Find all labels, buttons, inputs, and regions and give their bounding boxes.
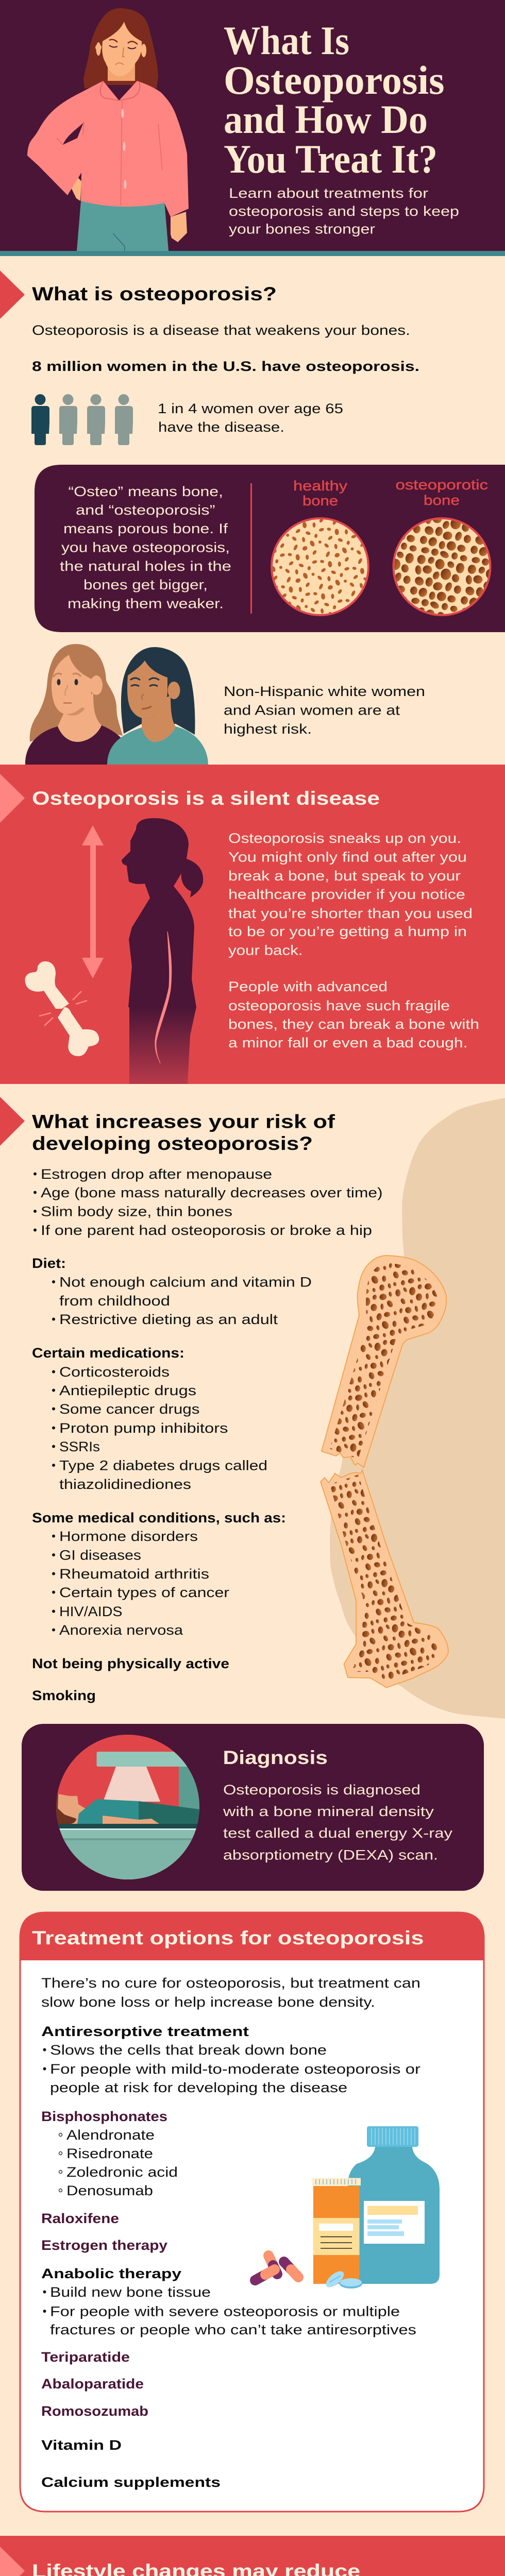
subsection: anabolic therapy: Build new bone tissue <box>50 2284 211 2300</box>
intro text: There’s no cure for osteoporosis, but treatment can <box>41 1975 420 1991</box>
list: certain medications <box>32 1345 267 1492</box>
list: general risk factors: Estrogen drop after menopause <box>41 1166 272 1182</box>
list: certain medications: Certain medications: <box>32 1345 184 1361</box>
icon: fracture sparks <box>39 991 87 1026</box>
list: certain medications: thiazolidinediones <box>59 1477 191 1492</box>
definition text: Osteoporosis is a disease that weakens your bones. <box>32 323 410 338</box>
definition text: “Osteo” means bone, <box>68 484 223 499</box>
list: certain medications: Corticosteroids <box>59 1364 170 1380</box>
background blob <box>330 1098 505 1719</box>
list: diet: Not enough calcium and vitamin D <box>59 1275 312 1290</box>
title: You Treat It? <box>224 137 437 181</box>
drug: abaloparatide: Abaloparatide <box>41 2376 144 2392</box>
panel: what is osteoporosis <box>0 270 505 765</box>
definition text: you have osteoporosis, <box>61 540 230 555</box>
list: certain medications: Type 2 diabetes drugs called <box>59 1458 267 1473</box>
list: medical conditions: Hormone disorders <box>59 1529 198 1544</box>
risk text: highest risk groups <box>224 684 425 737</box>
body text: diagnosis: absorptiometry (DEXA) scan. <box>223 1848 438 1863</box>
icon: broken bone <box>25 961 99 1056</box>
icon: section chevron <box>0 270 25 319</box>
title: and How Do <box>224 97 428 142</box>
body text: diagnosis: with a bone mineral density <box>223 1804 434 1819</box>
panel: lifestyle changes <box>0 2536 505 2576</box>
definition text: the natural holes in the <box>60 558 231 574</box>
subtitle: osteoporosis and steps to keep <box>229 204 459 219</box>
illustration: woman holding her back <box>27 8 189 251</box>
body text: silent disease: healthcare provider if you notice <box>228 887 465 902</box>
label: healthy bone <box>293 478 348 509</box>
body text: silent disease: your back. <box>228 943 303 958</box>
subtitle: your bones stronger <box>229 222 375 237</box>
panel: diagnosis <box>22 1724 484 1891</box>
risk text: highest risk groups: highest risk. <box>224 721 312 737</box>
subsection: antiresorptive treatment: For people with mild-to-moderate osteoporosis or <box>50 2061 420 2077</box>
icon: section chevron <box>0 2547 25 2576</box>
list: certain medications: Some cancer drugs <box>59 1401 200 1417</box>
list: general risk factors: Slim body size, thin bones <box>41 1204 232 1219</box>
panel: risk factors <box>0 1097 505 1719</box>
list: certain medications: Proton pump inhibitors <box>59 1420 228 1436</box>
drug list: bisphosphonates <box>41 2109 178 2198</box>
heading: Treatment options for osteoporosis <box>32 1927 424 1948</box>
list: general risk factors: Age (bone mass naturally decreases over time) <box>41 1185 382 1200</box>
body text: silent disease: that you’re shorter than you used <box>228 906 473 921</box>
body text: silent disease: to be or you’re getting a hump in <box>228 924 467 939</box>
statistic: 1 in 4: have the disease. <box>158 419 284 435</box>
list: general risk factors: If one parent had osteoporosis or broke a hip <box>41 1223 372 1238</box>
heading: Osteoporosis is a silent disease <box>32 788 380 809</box>
heading: What increases your risk of <box>32 1111 335 1132</box>
subsection: antiresorptive treatment: people at risk for developing the disease <box>50 2080 347 2095</box>
title: What Is <box>224 18 349 63</box>
list: medical conditions: HIV/AIDS <box>59 1604 123 1619</box>
definition text: and “osteoporosis” <box>76 502 215 518</box>
label: osteoporotic bone: osteoporotic <box>396 477 488 493</box>
list: diet: from childhood <box>59 1293 170 1309</box>
definition text: making them weaker. <box>68 596 224 611</box>
body text: diagnosis: test called a dual energy X-ray <box>223 1825 453 1841</box>
illustration: two women <box>25 644 208 765</box>
body text: silent disease: bones, they can break a bone with <box>228 1016 479 1032</box>
intro text <box>41 1975 420 2010</box>
illustration: DEXA scan <box>56 1735 199 1879</box>
intro text: slow bone loss or help increase bone density. <box>41 1994 375 2010</box>
heading: developing osteoporosis? <box>32 1133 313 1154</box>
drug list: bisphosphonates: Alendronate <box>66 2127 155 2143</box>
list: certain medications: SSRIs <box>59 1439 100 1454</box>
supplement: calcium: Calcium supplements <box>41 2475 221 2490</box>
supplement: vitamin D: Vitamin D <box>41 2437 122 2453</box>
body text: silent disease <box>228 831 479 1050</box>
subsection: antiresorptive treatment: Slows the cells that break down bone <box>50 2042 327 2058</box>
risk text: highest risk groups: and Asian women are at <box>224 703 400 718</box>
statistic: 1 in 4: 1 in 4 women over age 65 <box>158 401 343 416</box>
panel: osteo definition and bone comparison <box>35 465 505 632</box>
label: osteoporotic bone: bone <box>424 493 460 508</box>
list: diet: Restrictive dieting as an adult <box>59 1312 278 1327</box>
label: osteoporotic bone <box>396 477 488 508</box>
definition text <box>60 484 231 611</box>
label: healthy bone: healthy <box>293 478 348 494</box>
list: diet: Diet: <box>32 1256 66 1271</box>
panel: silent disease <box>0 765 505 1084</box>
definition text: means porous bone. If <box>63 521 228 536</box>
body text: silent disease: break a bone, but speak to your <box>228 868 461 884</box>
panel: header <box>0 0 505 256</box>
body text: diagnosis <box>223 1782 453 1863</box>
subtitle: Learn about treatments for <box>229 185 428 201</box>
risk factor: smoking: Smoking <box>32 1688 96 1703</box>
body text: silent disease: Osteoporosis sneaks up on you. <box>228 831 461 846</box>
risk factor: inactivity: Not being physically active <box>32 1656 229 1671</box>
body text: silent disease: You might only find out after you <box>228 850 467 865</box>
icon: height loss arrow <box>82 825 104 978</box>
icon: woman silhouette with spine <box>122 818 203 1084</box>
list: medical conditions: Rheumatoid arthritis <box>59 1566 209 1582</box>
icon: section chevron <box>0 774 25 823</box>
body text: silent disease: a minor fall or even a bad cough. <box>228 1035 468 1050</box>
title <box>224 18 444 181</box>
statistic: 8 million women: 8 million women in the U.S. have osteoporosis. <box>32 359 419 374</box>
drug list: bisphosphonates: Bisphosphonates <box>41 2109 167 2124</box>
icon: healthy bone cross-section <box>272 518 368 615</box>
icon: four women pictogram <box>31 394 133 445</box>
subtitle <box>229 185 459 237</box>
list: medical conditions: Some medical conditions, such as: <box>32 1510 286 1526</box>
title: Osteoporosis <box>224 58 444 103</box>
drug list: bisphosphonates: Zoledronic acid <box>66 2164 178 2180</box>
body text: silent disease: People with advanced <box>228 979 388 994</box>
list: certain medications: Antiepileptic drugs <box>59 1383 196 1398</box>
subsection: anabolic therapy <box>41 2266 416 2337</box>
subsection: anabolic therapy: For people with severe osteoporosis or multiple <box>50 2304 400 2319</box>
label: healthy bone: bone <box>302 493 338 509</box>
heading <box>32 1111 335 1154</box>
body text: silent disease: osteoporosis have such fragile <box>228 998 450 1013</box>
list: medical conditions: Certain types of cancer <box>59 1585 229 1600</box>
list: medical conditions: GI diseases <box>59 1548 141 1563</box>
subsection: anabolic therapy: fractures or people who can’t take antiresorptives <box>50 2322 416 2337</box>
subsection: antiresorptive treatment: Antiresorptive treatment <box>41 2024 249 2039</box>
drug list: bisphosphonates: Denosumab <box>66 2183 153 2198</box>
definition text: bones get bigger, <box>83 577 208 592</box>
list: medical conditions <box>32 1510 286 1638</box>
statistic: 1 in 4 <box>158 401 343 435</box>
drug: romosozumab: Romosozumab <box>41 2403 148 2419</box>
drug list: bisphosphonates: Risedronate <box>66 2146 153 2161</box>
subsection: anabolic therapy: Anabolic therapy <box>41 2266 181 2281</box>
drug: estrogen therapy: Estrogen therapy <box>41 2238 167 2253</box>
icon: osteoporotic bone cross-section <box>394 518 491 615</box>
list: medical conditions: Anorexia nervosa <box>59 1622 183 1638</box>
body text: diagnosis: Osteoporosis is diagnosed <box>223 1782 420 1798</box>
illustration: fractured femur <box>321 1256 448 1688</box>
heading: Diagnosis <box>223 1747 328 1768</box>
heading: What is osteoporosis? <box>32 283 277 304</box>
list: general risk factors <box>33 1166 382 1238</box>
subsection: antiresorptive treatment <box>41 2024 420 2095</box>
illustration: medicine bottles and pills <box>255 2126 440 2290</box>
icon: section chevron <box>0 1097 25 1146</box>
drug: teriparatide: Teriparatide <box>41 2349 130 2365</box>
list: diet <box>32 1256 312 1327</box>
panel: treatment options <box>20 1912 484 2512</box>
risk text: highest risk groups: Non-Hispanic white women <box>224 684 425 699</box>
drug: raloxifene: Raloxifene <box>41 2211 119 2226</box>
